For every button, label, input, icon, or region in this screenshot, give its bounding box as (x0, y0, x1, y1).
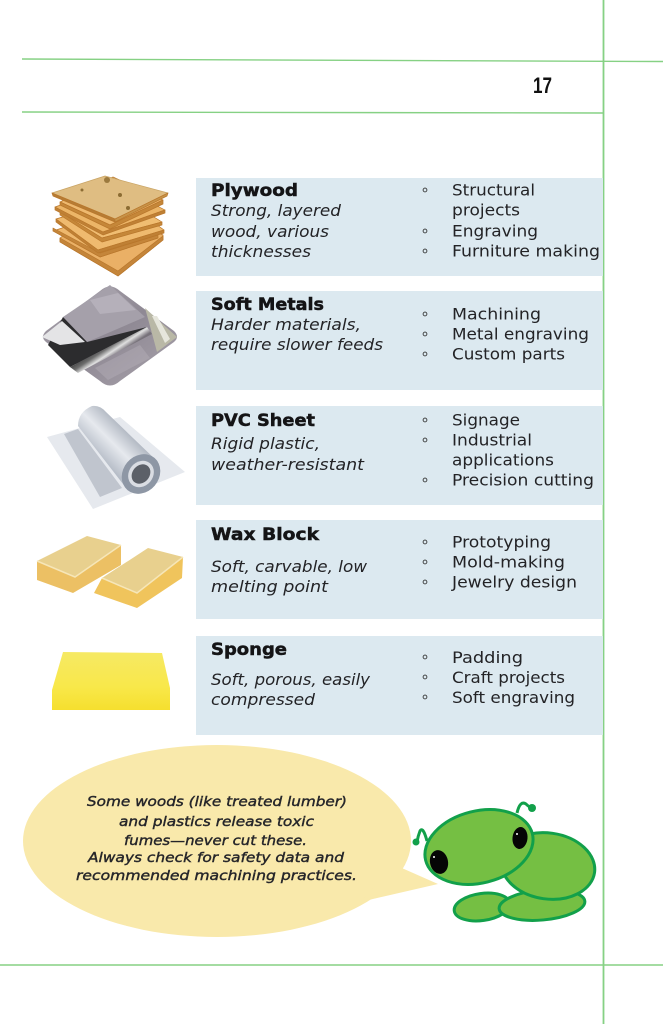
callout: safety speech bubble: Some woods (like treated lumber) (87, 794, 347, 810)
panel background (196, 636, 603, 735)
description (211, 670, 371, 709)
panel background (196, 520, 603, 619)
uses list: Jewelry design (451, 574, 577, 592)
image: plywood stack (52, 176, 168, 276)
image: sponge (52, 652, 170, 710)
uses list: Padding (452, 649, 523, 667)
description: wood, various (211, 222, 329, 241)
uses list (423, 306, 589, 364)
callout: safety speech bubble: fumes—never cut these. (124, 833, 307, 849)
heading: Sponge (211, 640, 287, 660)
heading: Plywood (211, 181, 298, 201)
uses list: Furniture making (452, 242, 600, 260)
panel background (196, 291, 603, 390)
callout: safety speech bubble: and plastics release toxic (119, 814, 315, 830)
uses list: Structural (452, 182, 535, 200)
description (211, 201, 342, 261)
uses list: Metal engraving (452, 326, 589, 344)
description: Strong, layered (211, 201, 342, 220)
uses list: Prototyping (452, 534, 551, 552)
icon: green ant mascot (412, 799, 599, 924)
uses list (423, 649, 575, 707)
panel: PVC sheet row (47, 406, 603, 509)
description: melting point (211, 577, 329, 596)
page number: 17 (533, 73, 552, 98)
uses list: Craft projects (452, 669, 565, 687)
uses list: Engraving (452, 222, 538, 240)
description (211, 434, 365, 474)
heading: Wax Block (211, 525, 320, 545)
panel: soft metals row (42, 285, 603, 390)
description (211, 557, 368, 596)
panel: sponge row (52, 636, 603, 735)
description: Soft, carvable, low (211, 557, 368, 576)
uses list: projects (452, 202, 520, 220)
panel: wax block row (37, 520, 603, 619)
callout: safety speech bubble (23, 745, 438, 937)
panel: plywood row (52, 176, 603, 276)
heading: PVC Sheet (211, 411, 315, 431)
uses list: Custom parts (452, 346, 565, 364)
description (211, 315, 383, 354)
uses list: Precision cutting (452, 472, 594, 490)
uses list: applications (452, 452, 554, 470)
description: weather-resistant (211, 455, 365, 474)
panel background (196, 178, 603, 276)
heading: Soft Metals (211, 295, 324, 315)
uses list: Signage (452, 412, 520, 430)
description: compressed (211, 690, 316, 709)
description: Rigid plastic, (211, 434, 320, 453)
uses list (423, 412, 594, 490)
description: Harder materials, (211, 315, 361, 334)
callout: safety speech bubble: recommended machining practices. (76, 868, 357, 884)
description: require slower feeds (211, 335, 383, 354)
callout: safety speech bubble: Always check for safety data and (87, 850, 344, 866)
uses list: Mold-making (452, 554, 565, 572)
image: wax blocks (37, 536, 183, 608)
panel background (196, 406, 603, 505)
description: thicknesses (211, 242, 311, 261)
uses list (423, 534, 577, 592)
image: PVC roll (47, 406, 185, 509)
uses list: Machining (452, 306, 541, 324)
description: Soft, porous, easily (211, 670, 371, 689)
uses list: Soft engraving (452, 689, 575, 707)
uses list (423, 182, 600, 260)
uses list: Industrial (452, 432, 532, 450)
image: metal sheet (42, 285, 177, 386)
